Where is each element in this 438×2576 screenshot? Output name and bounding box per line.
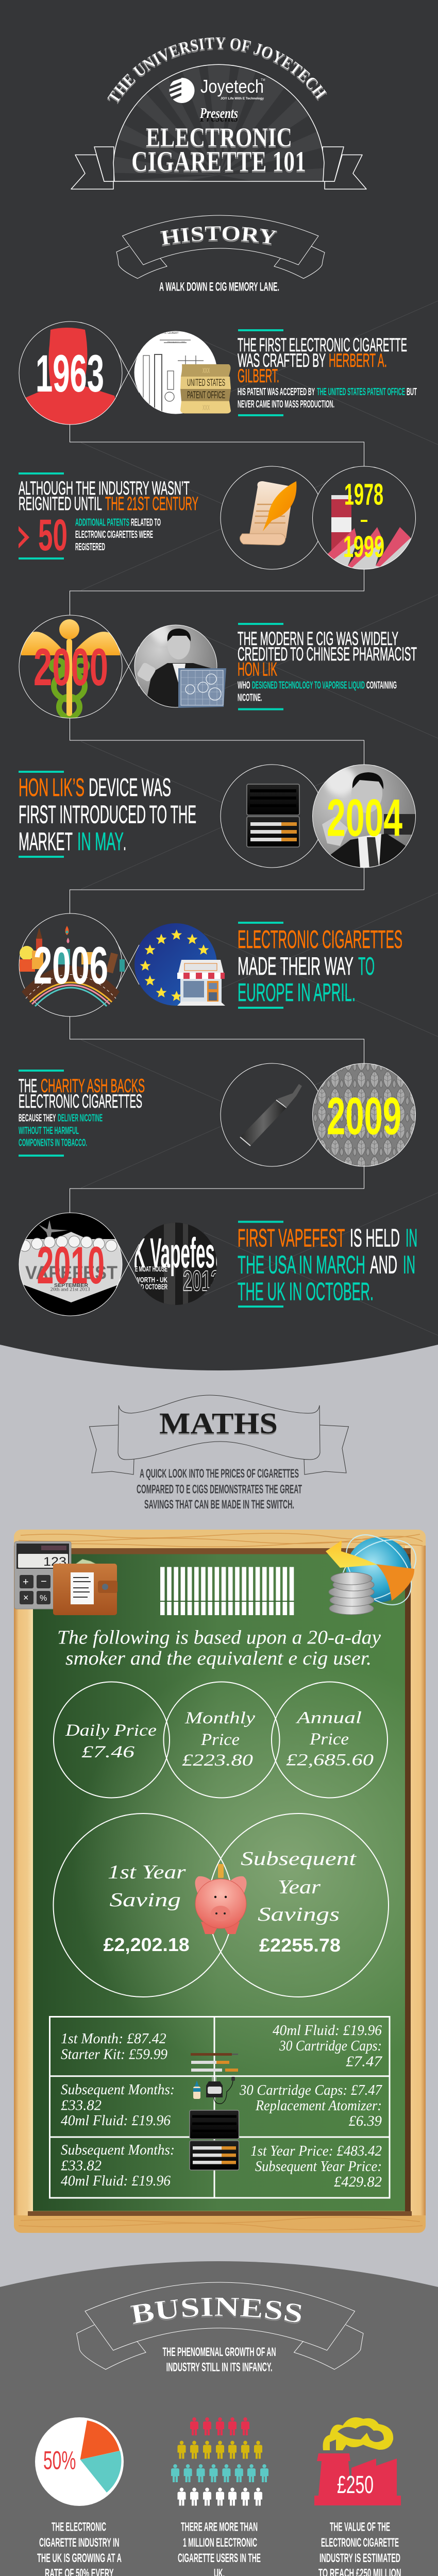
2009 text: BECAUSE THEY — [19, 1113, 56, 1124]
2009 text: CHARITY ASH BACKS — [41, 1075, 145, 1096]
hon lik portrait circle — [134, 623, 219, 711]
title dome — [113, 64, 325, 182]
hon lik smoking photo with 2004 — [312, 765, 416, 868]
wallet icon — [53, 1559, 117, 1615]
timeline 2006 — [19, 913, 402, 1016]
factory icon — [314, 2417, 401, 2505]
chalkboard panel — [14, 1522, 427, 2233]
1978 text: THE 21ST CENTURY — [105, 493, 198, 514]
business subtitle: INDUSTRY STILL IN ITS INFANCY. — [166, 2361, 273, 2375]
2000 text: CONTAINING — [366, 680, 397, 691]
background: grey maths section — [0, 1345, 438, 2318]
maths banner — [90, 1395, 348, 1475]
factory circle with dates: 1978 — [344, 478, 383, 511]
2009 text: THE — [19, 1075, 37, 1096]
price table: 40ml Fluid: £19.96 — [61, 2112, 171, 2129]
savings venn: £2255.78 — [259, 1935, 341, 1956]
chalk intro text: The following is based upon a 20-a-day — [57, 1627, 381, 1649]
vegas sign circle — [15, 1213, 126, 1316]
2004 text: FIRST INTRODUCED TO THE — [19, 801, 196, 829]
2006 text — [238, 922, 402, 1009]
chalk intro text — [57, 1627, 381, 1669]
text: BUT — [407, 386, 417, 398]
shop icon — [177, 960, 225, 1006]
business subtitle — [163, 2345, 276, 2375]
vegas sign circle: 20th and 21st 2013 — [50, 1287, 90, 1292]
business banner: BUSINESS — [130, 2297, 302, 2326]
vape battery circle — [221, 1063, 324, 1166]
caption — [318, 2520, 401, 2576]
cross lines — [116, 941, 139, 989]
calculator icon: = — [57, 1584, 62, 1595]
timeline 2010 — [15, 1213, 417, 1316]
joyetech logo: Joyetech — [200, 76, 264, 97]
price table: 40ml Fluid: £19.96 — [61, 2173, 171, 2189]
price circles: £7.46 — [81, 1743, 135, 1761]
2009 text — [19, 1070, 145, 1157]
caduceus circle: 2000 — [33, 638, 108, 697]
price table: 1st Year Price: £483.42 — [250, 2143, 382, 2159]
2004 text: IN MAY — [77, 828, 124, 856]
factory icon: £250 — [337, 2471, 374, 2499]
city illustration circle: 2006 — [33, 936, 108, 995]
curved title: the university of joyetech: THE UNIVERSITY OF JOYETECH — [107, 37, 327, 104]
savings venn: Saving — [109, 1889, 181, 1911]
united states patent office badge — [180, 364, 231, 413]
timeline 2004 — [19, 765, 420, 876]
vegas sign circle: SEPTEMBER — [54, 1283, 89, 1289]
price table: 40ml Fluid: £19.96 — [273, 2022, 382, 2039]
1963 text: WAS CRAFTED BY — [238, 350, 326, 371]
price circles: £223.80 — [182, 1751, 254, 1770]
uk vapefest circle: 2013 — [183, 1264, 220, 1297]
2006 text: TO — [358, 953, 375, 980]
main title: CIGARETTE 101 — [131, 146, 306, 178]
patent drawing circle — [134, 331, 217, 414]
2009 text: DELIVER NICOTINE — [58, 1113, 103, 1124]
wooden frame — [14, 1530, 426, 2233]
price table: 30 Cartridge Caps: £7.47 — [239, 2082, 382, 2098]
price table: 1st Month: £87.42 — [61, 2030, 166, 2047]
price table: £7.47 — [346, 2054, 383, 2070]
joyetech logo: TM — [261, 79, 265, 82]
savings venn — [54, 1814, 389, 1997]
timeline 2000 — [19, 615, 417, 718]
1978 text: ADDITIONAL PATENTS — [75, 517, 129, 529]
timeline 2010: K Vapefest — [133, 1230, 221, 1277]
1978 text: ELECTRONIC CIGARETTES WERE — [75, 529, 153, 540]
starter kit icons — [190, 2053, 239, 2170]
united states patent office badge: XXX — [203, 366, 210, 375]
caption — [178, 2520, 261, 2576]
background: diagonal history lines — [81, 301, 438, 1335]
1978 text: ALTHOUGH THE INDUSTRY WASN’T — [19, 478, 190, 499]
piggy bank icon — [195, 1864, 246, 1934]
price circles — [54, 1682, 388, 1798]
calculator icon: × — [23, 1592, 29, 1603]
2004 text: MARKET — [19, 828, 73, 856]
price circles: Price — [309, 1730, 349, 1749]
price table — [49, 2016, 390, 2198]
business banner — [76, 2282, 364, 2370]
vegas sign circle: VAPEFEST — [25, 1262, 117, 1283]
eu flag circle — [134, 923, 217, 1006]
1963 text — [238, 329, 417, 416]
people pictogram — [171, 2417, 268, 2506]
history subtitle: A WALK DOWN E CIG MEMORY LANE. — [159, 280, 279, 294]
text: IN — [406, 1225, 417, 1252]
background: dark upper section — [0, 0, 438, 1401]
2000 text: WHO — [238, 680, 250, 691]
stat: 1 million users — [171, 2417, 268, 2576]
savings venn: Subsequent — [241, 1848, 357, 1870]
2010 text — [238, 1221, 417, 1308]
background: mid grey lower section — [0, 2261, 438, 2576]
uk vapefest circle: E MOAT HOUSE — [135, 1265, 167, 1274]
patent drawing circle: Filed April 17, 1963 — [167, 341, 186, 343]
presents: Presents — [199, 106, 238, 122]
price circles: Price — [200, 1731, 240, 1749]
1963 text: NEVER CAME INTO MASS PRODUCTION. — [238, 399, 334, 410]
1978 text: REGISTERED — [75, 541, 105, 553]
2000 text: HON LIK — [238, 659, 277, 680]
scroll and quill circle — [221, 466, 324, 569]
caption: THE ELECTRONIC — [52, 2520, 106, 2534]
calculator icon — [14, 1541, 71, 1609]
caption — [37, 2520, 122, 2576]
2009 text: COMPONENTS IN TOBACCO. — [19, 1137, 87, 1148]
calculator icon: % — [40, 1594, 47, 1603]
price circles: £2,685.60 — [286, 1751, 374, 1770]
title badge — [71, 37, 367, 190]
1978 text: RELATED TO — [131, 517, 161, 529]
2004 text — [19, 771, 196, 858]
caption: 1 MILLION ELECTRONIC — [183, 2536, 257, 2550]
price table: Subsequent Months: — [61, 2142, 175, 2158]
1963 text: HIS PATENT WAS ACCEPTED BY — [238, 386, 315, 398]
stat: £250 factory — [314, 2417, 401, 2576]
price circles: Annual — [295, 1708, 362, 1727]
1963 text: GILBERT. — [238, 365, 279, 386]
2000 text — [238, 623, 417, 710]
1963 circle with silhouette: 1963 — [36, 344, 104, 403]
factory circle with dates: 1999 — [343, 530, 384, 564]
presents — [199, 106, 238, 125]
blueprint card — [178, 668, 226, 708]
united states patent office badge: XXX — [203, 403, 210, 412]
timeline connectors — [70, 425, 364, 1213]
united states patent office badge: UNITED STATES — [187, 378, 225, 388]
price table: £33.82 — [61, 2158, 102, 2174]
maths banner: MATHS — [159, 1406, 278, 1440]
price circles: Daily Price — [65, 1721, 157, 1740]
main title: ELECTRONIC — [146, 123, 292, 152]
caption: CIGARETTE USERS IN THE — [178, 2551, 261, 2565]
maths subtitle: SAVINGS THAT CAN BE MADE IN THE SWITCH. — [144, 1498, 294, 1512]
joyetech logo — [169, 76, 265, 103]
caption: CIGARETTE INDUSTRY IN — [39, 2536, 120, 2550]
savings venn: 1st Year — [108, 1861, 186, 1883]
2004 text: HON LIK’S — [19, 774, 85, 802]
timeline 1963 — [15, 321, 417, 428]
business subtitle: THE PHENOMENAL GROWTH OF AN — [163, 2345, 276, 2359]
calculator icon: + — [23, 1577, 29, 1588]
main title — [131, 123, 306, 178]
pie — [35, 2417, 124, 2506]
2004 text: . — [123, 828, 126, 856]
calculator icon: − — [41, 1576, 47, 1587]
pie: 50% — [43, 2446, 76, 2475]
caption: THE UK IS GROWING AT A — [37, 2551, 122, 2565]
2009 text: ELECTRONIC CIGARETTES — [19, 1091, 142, 1112]
price table: Subsequent Months: — [61, 2081, 175, 2098]
savings venn: £2,202.18 — [104, 1934, 190, 1955]
1963 circle with silhouette — [15, 321, 124, 428]
2004 text: DEVICE WAS — [89, 774, 171, 802]
timeline 1978-1999 — [19, 466, 418, 572]
presents: Presents — [199, 109, 238, 125]
2009 text: WITHOUT THE HARMFUL — [19, 1125, 79, 1137]
green board — [33, 1554, 411, 2211]
price table: £33.82 — [61, 2097, 102, 2114]
chalk intro text: smoker and the equivalent e cig user. — [65, 1648, 372, 1669]
uk vapefest circle — [134, 1223, 217, 1305]
timeline 2009 — [19, 1063, 415, 1166]
uk vapefest circle: WORTH - UK — [135, 1276, 167, 1284]
maths subtitle — [137, 1467, 302, 1512]
cross lines — [116, 642, 139, 690]
maths subtitle: A QUICK LOOK INTO THE PRICES OF CIGARETTES — [140, 1467, 299, 1481]
globe, arrow and coins icon — [326, 1522, 427, 1617]
price table: £429.82 — [334, 2174, 382, 2190]
2010 text: AND — [370, 1251, 397, 1279]
stat: 50% pie chart — [35, 2417, 124, 2576]
patent drawing circle: H. A. GILBERT — [161, 332, 179, 335]
1978 text: 50 — [38, 511, 68, 560]
price table: Replacement Atomizer: — [255, 2097, 382, 2114]
1978 text — [19, 472, 198, 560]
savings venn: Year — [278, 1876, 321, 1898]
savings venn: Savings — [258, 1904, 340, 1925]
calculator icon: 123 — [43, 1555, 66, 1569]
price circles: Monthly — [184, 1709, 255, 1727]
uk vapefest circle: 2ND OCTOBER — [135, 1283, 167, 1291]
price table: Starter Kit: £59.99 — [61, 2046, 167, 2063]
2010 text: IN — [403, 1251, 415, 1279]
history banner — [116, 215, 325, 279]
2000 text: NICOTINE. — [238, 692, 262, 704]
title ribbon outlines — [71, 147, 366, 189]
history banner: HISTORY — [160, 226, 277, 246]
caduceus circle — [19, 615, 122, 718]
price table: Subsequent Year Price: — [255, 2158, 382, 2175]
city illustration circle — [19, 913, 125, 1016]
caption: THERE ARE MORE THAN — [181, 2520, 258, 2534]
cigarette case circle — [221, 765, 324, 868]
joyetech logo: JOY Life With E Technology — [221, 97, 264, 100]
cross lines between circles — [116, 349, 139, 397]
cigarette tally bars — [160, 1567, 294, 1615]
vegas sign circle: 2010 — [37, 1236, 105, 1295]
price table: 30 Cartridge Caps: — [279, 2038, 382, 2054]
1978 text: REIGNITED UNTIL — [19, 493, 102, 514]
tobacco leaves photo with 2009 — [312, 1063, 415, 1166]
price table: £6.39 — [348, 2113, 382, 2129]
cross lines — [116, 1240, 139, 1288]
united states patent office badge: PATENT OFFICE — [187, 390, 225, 401]
factory circle with dates — [312, 466, 418, 572]
